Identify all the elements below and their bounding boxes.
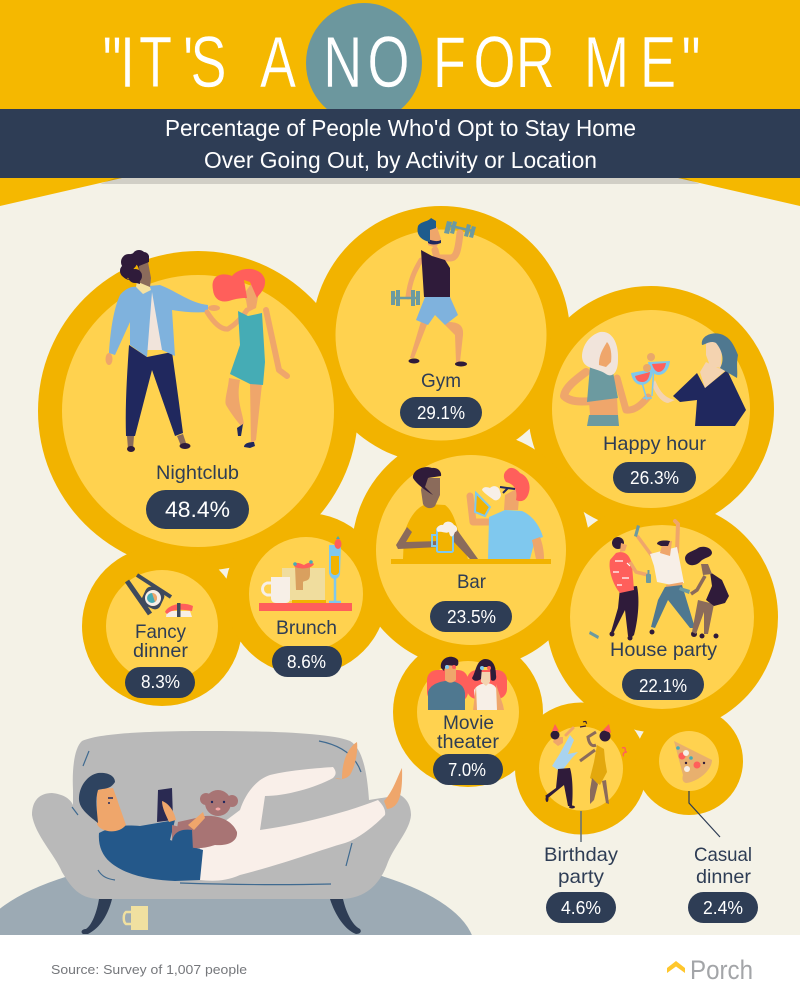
label: [133, 621, 189, 662]
man neck and head: [97, 788, 126, 831]
title: FOR ME": [420, 23, 701, 103]
label: dinner: [696, 866, 752, 888]
label: Casual: [694, 844, 752, 866]
band shadow: [100, 178, 700, 184]
panel: movie theater: [417, 657, 519, 785]
panel: casual dinner: [659, 731, 758, 923]
subtitle band: Percentage of People Who'd Opt to Stay Home: [165, 115, 636, 141]
man arm: [172, 825, 193, 850]
illustration: two men drinking beer: [391, 467, 551, 564]
connector line: [689, 791, 720, 837]
value pill: [613, 462, 696, 493]
mug: [124, 906, 148, 930]
teal oval: [306, 3, 422, 123]
label: theater: [437, 731, 500, 753]
value pill: [400, 397, 482, 428]
illustration: birthday dancers: [545, 721, 627, 808]
label: Brunch: [276, 617, 337, 639]
value pill: 29.1%: [417, 403, 465, 423]
label: [437, 712, 500, 753]
illustration: pizza slice: [674, 741, 712, 783]
subtitle band: Over Going Out, by Activity or Location: [204, 147, 597, 173]
label: Movie: [443, 712, 494, 734]
illustration: dancing couple: [106, 250, 287, 452]
value pill: [146, 490, 249, 529]
value pill: 8.6%: [287, 652, 326, 672]
illustration: couple at the movies: [427, 657, 507, 710]
value pill: [688, 892, 758, 923]
value pill: 7.0%: [448, 760, 486, 780]
value pill: 8.3%: [141, 672, 180, 692]
label: Happy hour: [603, 433, 707, 455]
source: Source: Survey of 1,007 people: [51, 962, 247, 977]
illustration: sushi and chopsticks: [127, 575, 193, 617]
value pill: [430, 601, 512, 632]
value pill: [272, 646, 342, 677]
label: [694, 844, 752, 888]
panel: happy hour: [552, 310, 750, 508]
label: Nightclub: [156, 462, 239, 484]
Porch logo: Porch: [690, 955, 753, 985]
value pill: 4.6%: [561, 898, 601, 918]
illustration: people dancing: [589, 521, 729, 640]
illustration: friends toasting: [564, 332, 746, 426]
panel: bar: [376, 455, 566, 645]
label: dinner: [133, 640, 189, 662]
far foot: [335, 742, 357, 779]
label: Birthday: [544, 844, 618, 866]
panel: house party: [570, 521, 754, 709]
rug: [0, 876, 472, 935]
phone: [157, 788, 176, 822]
panel: brunch: [249, 536, 363, 677]
label: Fancy: [135, 621, 186, 643]
connector line: [580, 811, 582, 842]
value pill: 48.4%: [165, 497, 230, 522]
man torso: [99, 820, 203, 881]
subtitle band: [0, 109, 800, 178]
value pill: 23.5%: [447, 607, 496, 627]
illustration: weightlifter: [391, 218, 476, 366]
title: "IT'S A: [102, 23, 337, 103]
label: Gym: [421, 370, 461, 392]
header yellow background: [0, 0, 800, 206]
label: party: [558, 866, 604, 888]
dog: [175, 790, 238, 848]
Porch logo: [667, 955, 753, 985]
value pill: [546, 892, 616, 923]
sofa creases: [72, 741, 361, 885]
value pill: 26.3%: [630, 468, 679, 488]
sofa legs: [82, 899, 361, 934]
label: [544, 844, 618, 888]
illustration: brunch table: [259, 536, 352, 611]
footer band: [0, 935, 800, 1000]
yellow bubble cluster: [38, 206, 778, 834]
panel: nightclub: [62, 250, 334, 547]
illustration: man relaxing on sofa: [0, 731, 472, 935]
value pill: [622, 669, 704, 700]
title: NO: [323, 23, 410, 103]
label: House party: [610, 639, 717, 661]
panel: fancy dinner: [106, 570, 218, 698]
white trousers: [200, 767, 385, 881]
value pill: 22.1%: [639, 676, 687, 696]
sofa: [32, 731, 411, 899]
value pill: 2.4%: [703, 898, 743, 918]
label: Bar: [457, 571, 486, 593]
panel: gym: [336, 218, 546, 440]
panel: birthday party: [539, 721, 627, 923]
